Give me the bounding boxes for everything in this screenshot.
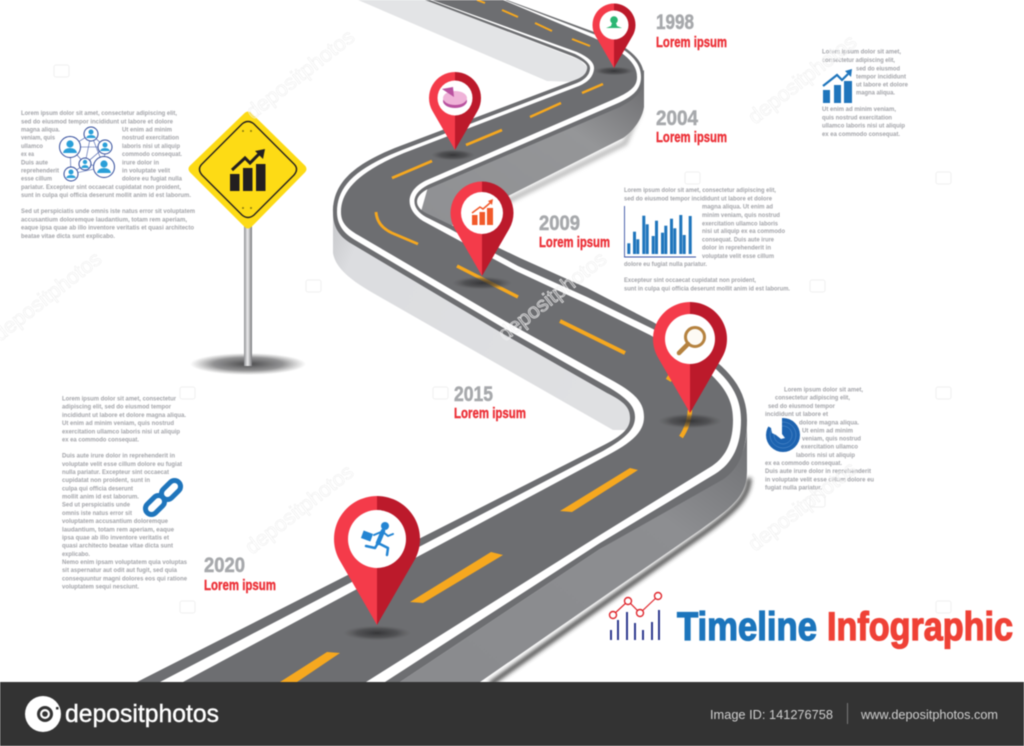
year label: 2015: Lorem ipsum — [454, 406, 526, 422]
text block: network: irure dolor in — [122, 159, 159, 166]
text block: network: Lorem ipsum dolor sit amet, consectetur adipiscing elit, — [21, 110, 177, 117]
bar chart — [624, 206, 696, 257]
text block: 2009 with chart: Lorem ipsum dolor sit amet, consectetur adipiscing elit, — [624, 187, 776, 194]
road sign — [190, 116, 306, 375]
text block: lower left: Ut enim ad minim veniam, quis nostrud — [62, 420, 174, 427]
text block: right with pie: Ut enim ad minim — [802, 427, 853, 434]
text block: right with pie: incididunt ut labore et — [765, 411, 828, 418]
year label: 2020 — [204, 554, 276, 594]
text block: network: laboris nisi ut aliquip — [122, 143, 180, 150]
text block: right with pie: fugiat nulla pariatur. — [765, 485, 822, 492]
text block: network: commodo consequat. — [122, 151, 182, 158]
text block: 2009 with chart: consequat. Duis aute irure — [702, 236, 775, 243]
pin: 2004 pie — [429, 72, 481, 160]
text block: top right: Lorem ipsum dolor sit amet, — [822, 49, 901, 56]
chart logo icon — [610, 592, 662, 640]
text block: top right: ex ea commodo consequat. — [822, 131, 900, 138]
text block: 2009 with chart: Excepteur sint occaecat cupidatat non proident, — [624, 277, 756, 284]
year label: 1998: Lorem ipsum — [656, 35, 727, 51]
footer logo — [25, 696, 61, 732]
winding road — [137, 0, 749, 684]
sign pole — [244, 226, 252, 366]
text block: right with pie: dolore magna aliqua. — [799, 419, 859, 426]
watermark — [0, 25, 861, 559]
text block: top right: ullamco laboris nisi ut aliquip — [822, 123, 905, 130]
text block: lower left: exercitation ullamco laboris nisi ut aliquip — [62, 428, 180, 435]
text block: 2009 with chart: dolor in reprehenderit in — [702, 245, 771, 252]
text block: network — [21, 110, 195, 240]
year label: 2004: 2004 — [656, 107, 698, 130]
text block: network: nostrud exercitation — [122, 135, 179, 142]
watermark: depositphotos — [241, 460, 358, 559]
year label: 1998 — [656, 11, 727, 51]
text block: lower left: Nemo enim ipsam voluptatem quia voluptas — [62, 559, 188, 566]
text block: network: dolore eu fugiat nulla — [122, 176, 183, 183]
text block: network: ullamco — [21, 143, 43, 150]
footer image id: Image ID: 141276758 — [710, 707, 833, 722]
sign rivets — [242, 130, 252, 209]
text block: right with pie: veniam, quis nostrud — [802, 436, 861, 443]
text block: 2009 with chart: exercitation ullamco laboris — [702, 220, 779, 227]
year label: 2004 — [656, 107, 727, 146]
text block: 2009 with chart: sed do eiusmod tempor incididunt ut labore et dolore — [624, 195, 773, 202]
text block: right with pie — [765, 386, 874, 492]
text block: top right: sed do eiusmod — [856, 65, 900, 72]
text block: lower left: nulla pariatur. Excepteur sint occaecat — [62, 469, 169, 476]
text block: top right: magna aliqua. — [856, 90, 895, 97]
icon: blue rising bar chart — [823, 69, 852, 103]
text block: 2009 with chart: nisi ut aliquip ex ea commodo — [702, 228, 785, 235]
text block: lower left: voluptatem sequi nesciunt. — [62, 584, 139, 591]
text block: right with pie: laboris nisi ut aliquip — [796, 452, 855, 459]
text block: network: esse cillum — [21, 176, 52, 183]
year label: 1998: 1998 — [656, 11, 694, 34]
text block: network: ex ea — [21, 151, 34, 158]
text block: lower left: incididunt ut labore et dolore magna aliqua. — [62, 412, 186, 419]
text block: lower left: Duis aute irure dolor in reprehenderit in — [62, 453, 175, 460]
year label: 2020: 2020 — [204, 554, 245, 577]
watermark: depositphotos — [494, 247, 611, 346]
text block: lower left: quasi architecto beatae vitae dicta sunt — [62, 543, 173, 550]
pin: 2020 runner — [334, 496, 420, 640]
text block: lower left: explicabo. — [62, 551, 90, 558]
text block: network: sed do eiusmod tempor incididunt ut labore et dolore — [21, 118, 174, 125]
pin: 1998 person — [593, 4, 635, 76]
text block: network: veniam, quis — [21, 135, 56, 142]
text block: lower left: ipsa quae ab illo inventore veritatis et — [62, 534, 169, 541]
text block: lower left: ex ea commodo consequat. — [62, 436, 139, 443]
watermark camera marks — [54, 65, 951, 613]
sign chart icon — [230, 149, 266, 191]
text block: 2009 with chart: sunt in culpa qui officia deserunt mollit anim id est laborum. — [624, 285, 790, 292]
year label: 2020: Lorem ipsum — [204, 578, 276, 594]
text block: network: eaque ipsa quae ab illo inventore veritatis et quasi architecto — [21, 225, 194, 232]
text block: top right: tempor incididunt — [856, 74, 906, 81]
text block: right with pie: Lorem ipsum dolor sit amet, — [784, 386, 863, 393]
text block: network: accusantium doloremque laudantium, totam rem aperiam, — [21, 216, 187, 224]
year label: 2015: 2015 — [454, 383, 493, 406]
text block: 2009 with chart: voluptate velit esse cillum — [702, 253, 774, 260]
year label: 2009: Lorem ipsum — [539, 235, 610, 251]
footer website: www.depositphotos.com — [860, 707, 998, 722]
text block: lower left: laudantium, totam rem aperiam, eaque — [62, 526, 175, 533]
text block: network: sunt in culpa qui officia deserunt mollit anim id est laborum. — [21, 192, 191, 199]
icon: people network — [60, 127, 114, 181]
year label: 2004: Lorem ipsum — [656, 130, 727, 146]
watermark: depositphotos — [242, 25, 359, 124]
text block: lower left: Lorem ipsum dolor sit amet, consectetur — [62, 395, 177, 402]
text block: top right: Ut enim ad minim veniam, — [822, 106, 896, 113]
text block: lower left: voluptate velit esse cillum dolore eu fugiat — [62, 461, 182, 468]
text block: lower left: omnis iste natus error sit — [62, 510, 132, 517]
text block: lower left: voluptatem accusantium doloremque — [62, 518, 169, 525]
text block: network: beatae vitae dicta sunt explicabo. — [21, 233, 115, 240]
text block: right with pie: consectetur adipiscing elit, — [775, 395, 850, 402]
pin: 2009 chart — [451, 182, 513, 290]
icon: chain link — [143, 478, 183, 517]
text block: top right — [822, 49, 909, 138]
year label: 2015 — [454, 383, 526, 422]
text block: lower left: sit aspernatur aut odit aut fugit, sed quia — [62, 567, 178, 574]
text block: right with pie: sed do eiusmod tempor — [768, 403, 836, 410]
watermark: depositphotos — [744, 30, 861, 129]
text block: network: in voluptate velit — [122, 168, 170, 174]
sign pole shadow — [190, 353, 306, 375]
text block: lower left: mollit anim id est laborum. — [62, 494, 139, 501]
text block: network: magna aliqua. — [21, 126, 60, 134]
black diamond border — [200, 122, 296, 218]
text block: top right: consectetur adipiscing elit, — [822, 57, 895, 64]
title: Timeline — [677, 605, 817, 649]
title — [677, 605, 1013, 649]
text block: lower left: Sed ut perspiciatis unde — [62, 502, 131, 509]
text block: right with pie: Duis aute irure dolor in reprehenderit — [765, 468, 871, 475]
text block: 2009 with chart: dolore eu fugiat nulla pariatur. — [624, 261, 707, 268]
text block: lower left: culpa qui officia deserunt — [62, 485, 133, 492]
text block: lower left: cupidatat non proident, sunt in — [62, 477, 150, 484]
text block: network: Duis aute — [21, 159, 49, 166]
footer divider — [847, 703, 848, 724]
text block: network: pariatur. Excepteur sint occaecat cupidatat non proident, — [21, 184, 181, 191]
text block: network: Ut enim ad minim — [122, 126, 172, 134]
text block: 2009 with chart — [624, 187, 790, 292]
yellow diamond — [193, 116, 302, 224]
text block: network: reprehenderit — [21, 168, 59, 174]
text block: lower left — [62, 395, 188, 591]
text block: top right: quis nostrud exercitation — [822, 114, 892, 121]
text block: lower left: adipiscing elit, sed do eiusmod tempor — [62, 404, 172, 411]
pin: search — [653, 302, 727, 428]
text block: 2009 with chart: magna aliqua. Ut enim ad — [702, 204, 773, 211]
text block: right with pie: exercitation ullamco — [801, 444, 858, 451]
footer brand: depositphotos — [65, 700, 219, 728]
text block: lower left: consequuntur magni dolores eos qui ratione — [62, 575, 188, 582]
watermark: depositphotos — [744, 457, 861, 556]
year label: 2009 — [539, 212, 610, 251]
year label: 2009: 2009 — [539, 212, 580, 235]
footer bar — [0, 682, 1024, 746]
text block: right with pie: ex ea commodo consequat. — [765, 460, 842, 467]
text block: right with pie: in voluptate velit esse cillum dolore eu — [765, 477, 874, 484]
text block: network: Sed ut perspiciatis unde omnis iste natus error sit voluptatem — [21, 208, 195, 215]
text block: top right: ut labore et dolore — [856, 81, 909, 88]
icon: blue radial pie — [766, 417, 800, 452]
text block: 2009 with chart: minim veniam, quis nostrud — [702, 212, 780, 219]
